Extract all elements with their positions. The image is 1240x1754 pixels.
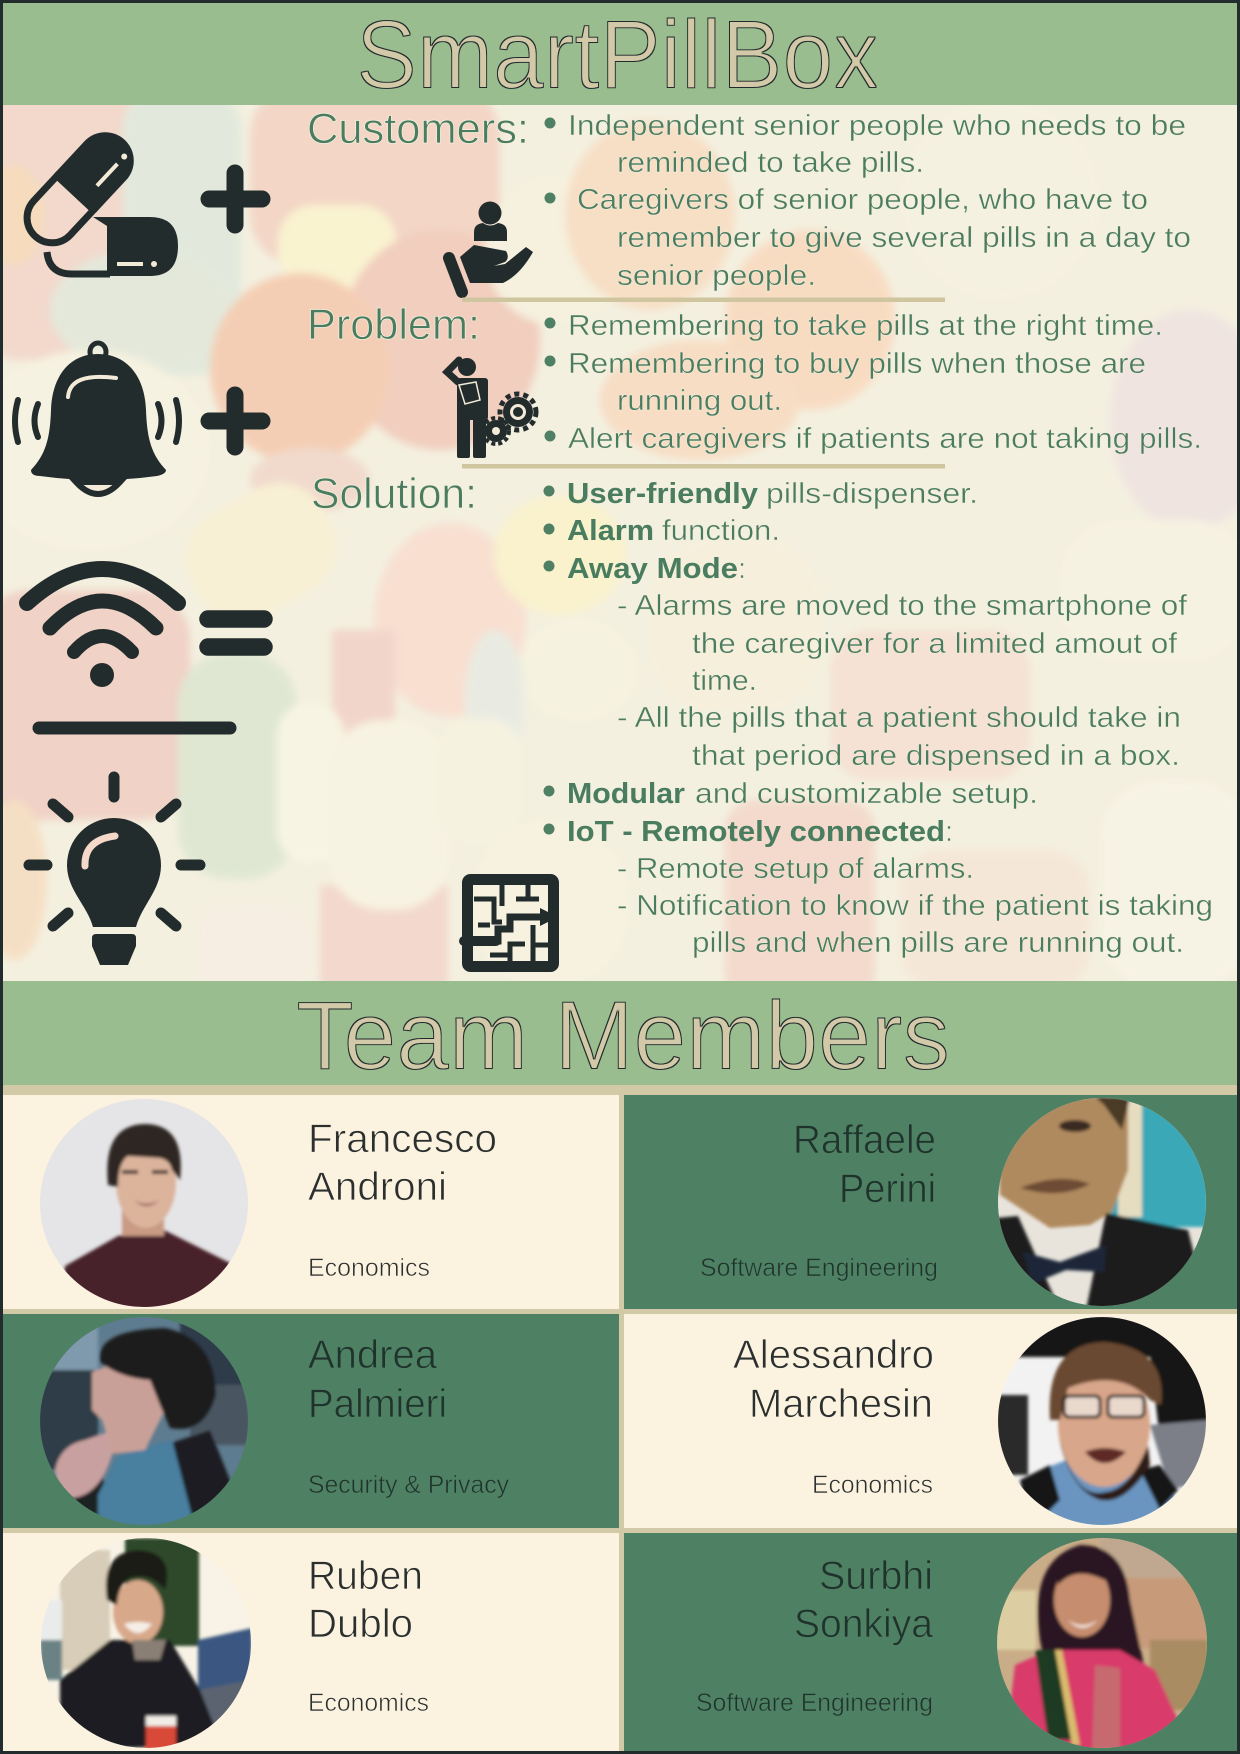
- panel: Andrea Palmieri: Palmieri: [308, 1382, 447, 1426]
- icon: caregiver hand: [449, 202, 533, 292]
- text block: customers list: senior people.: [617, 260, 816, 292]
- text block: solution list: - Remote setup of alarms.: [617, 853, 974, 885]
- portrait: Francesco: [38, 1097, 250, 1320]
- section band: team members: [3, 981, 1237, 1085]
- icon: fraction line: [39, 722, 230, 734]
- panel: Alessandro Marchesin: Marchesin: [749, 1382, 933, 1426]
- role: Security & Privacy: [308, 1471, 509, 1499]
- text block: solution list: Modular: [567, 778, 685, 810]
- panel: Raffaele Perini: Perini: [839, 1167, 936, 1211]
- icon: wifi: [27, 569, 178, 687]
- text block: solution list: Alarm: [567, 515, 654, 547]
- portrait: Alessandro: [996, 1315, 1208, 1530]
- text block: problem list: [544, 310, 1202, 455]
- text block: problem list: Remembering to take pills at the right time.: [568, 310, 1163, 342]
- text block: solution list: - Alarms are moved to the smartphone of: [617, 590, 1188, 622]
- text block: solution list: that period are dispensed in a box.: [692, 740, 1180, 772]
- name: Ruben: [308, 1554, 423, 1598]
- heading: solution: Solution:: [311, 470, 477, 518]
- icon: equals: [208, 619, 264, 647]
- text block: solution list: IoT - Remotely connected: [567, 816, 945, 848]
- portrait: Andrea: [38, 1315, 250, 1530]
- text block: solution list: - All the pills that a patient should take in: [617, 702, 1181, 734]
- text block: solution list: function.: [662, 515, 780, 547]
- text block: solution list: pills and when pills are running out.: [692, 927, 1184, 959]
- portrait: Raffaele: [996, 1097, 1208, 1310]
- heading: customers: Customers:: [307, 105, 529, 153]
- icon: light bulb: [29, 777, 200, 965]
- divider: [462, 298, 945, 302]
- text block: solution list: pills-dispenser.: [766, 478, 978, 510]
- text block: solution list: :: [738, 553, 746, 585]
- text block: solution list: [544, 478, 1213, 959]
- text block: solution list: User-friendly: [567, 478, 758, 510]
- text block: problem list: Alert caregivers if patients are not taking pills.: [568, 423, 1202, 455]
- text block: solution list: - Notification to know if the patient is taking: [617, 890, 1213, 922]
- panel: Francesco Androni: [3, 1095, 619, 1320]
- panel: Andrea Palmieri: [3, 1314, 619, 1530]
- name: Andrea: [308, 1333, 438, 1377]
- role: Economics: [812, 1471, 933, 1499]
- header band: [3, 3, 1237, 105]
- portrait: Ruben: [40, 1538, 252, 1750]
- name: Alessandro: [733, 1333, 934, 1377]
- divider: [462, 464, 945, 468]
- text block: customers list: remember to give several pills in a day to: [617, 222, 1191, 254]
- name: Raffaele: [793, 1118, 936, 1162]
- heading: team members: Team Members: [296, 981, 950, 1090]
- panel: Raffaele Perini: [624, 1095, 1237, 1310]
- role: Economics: [308, 1254, 430, 1282]
- icon: plus 2: [209, 395, 262, 447]
- panel: Surbhi Sonkiya: [624, 1533, 1237, 1751]
- text block: customers list: Caregivers of senior people, who have to: [577, 184, 1148, 216]
- text block: customers list: reminded to take pills.: [617, 147, 924, 179]
- grid background: [3, 1085, 1237, 1751]
- text block: problem list: Remembering to buy pills when those are: [568, 348, 1146, 380]
- text block: problem list: running out.: [617, 385, 782, 417]
- panel: pills photo background: [0, 85, 1240, 1000]
- role: Economics: [308, 1689, 429, 1717]
- panel: Ruben Dublo: Dublo: [308, 1602, 413, 1646]
- role: Software Engineering: [696, 1689, 933, 1717]
- text block: customers list: [544, 110, 1191, 292]
- text block: solution list: the caregiver for a limited amout of: [692, 628, 1178, 660]
- icon: worker with gears: [447, 358, 536, 458]
- text block: customers list: Independent senior people who needs to be: [568, 110, 1186, 142]
- name: Francesco: [308, 1117, 497, 1161]
- text block: solution list: :: [945, 816, 953, 848]
- text block: solution list: Away Mode: [567, 553, 738, 585]
- text block: solution list: and customizable setup.: [695, 778, 1038, 810]
- name: Surbhi: [819, 1554, 933, 1598]
- icon: plus 1: [209, 173, 262, 225]
- role: Software Engineering: [700, 1254, 938, 1282]
- icon: ringing bell: [15, 343, 179, 494]
- title: SmartPillBox: [356, 0, 879, 109]
- panel: Surbhi Sonkiya: Sonkiya: [794, 1602, 934, 1646]
- panel: Ruben Dublo: [3, 1533, 619, 1751]
- panel: Francesco Androni: Androni: [308, 1165, 447, 1209]
- panel: Alessandro Marchesin: [624, 1314, 1237, 1530]
- icon: maze: [464, 880, 558, 966]
- heading: problem: Problem:: [307, 301, 480, 349]
- icon: capsule pills: [14, 120, 178, 276]
- text block: solution list: time.: [692, 665, 757, 697]
- portrait: Surbhi: [996, 1538, 1208, 1750]
